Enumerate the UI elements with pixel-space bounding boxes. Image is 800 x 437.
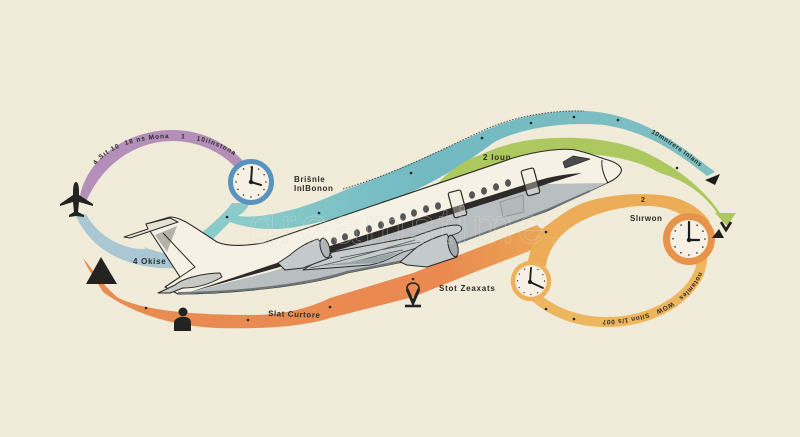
belly gray	[178, 183, 607, 294]
route: teal band	[202, 110, 715, 239]
door 2	[521, 168, 540, 196]
label: InlBonon: InlBonon	[294, 184, 333, 193]
belly shadow	[178, 191, 590, 293]
engine right	[400, 234, 460, 267]
route markers	[145, 116, 678, 321]
route: purple arc	[80, 130, 242, 200]
yellow label: notamles WOW Sllnn 1/s 007	[602, 272, 702, 324]
green label: 2 Ioun	[483, 153, 511, 162]
route: light blue arc	[76, 214, 176, 268]
engine left	[278, 237, 332, 270]
clock: small yellow	[513, 263, 549, 299]
windows	[331, 179, 511, 245]
door 1	[448, 190, 467, 218]
icon: location pin	[405, 278, 421, 306]
purple arc label: 4 Sıt 10 18 ns Mona 1 10ilnstona	[94, 134, 235, 164]
Slırwon label: Slırwon	[630, 214, 662, 223]
icon: person	[174, 308, 191, 331]
icon: teal arrowhead	[705, 174, 720, 185]
clock: blue	[230, 162, 272, 202]
dotted line to label	[343, 111, 584, 189]
nose line	[602, 160, 608, 183]
fuselage stripe	[190, 173, 582, 292]
tail fin and fuselage	[146, 149, 621, 294]
route: orange band	[83, 225, 552, 328]
light blue label: 4 Okise	[133, 257, 166, 266]
teal label: 10mnirers Inlans	[651, 130, 702, 166]
airplane	[124, 149, 621, 294]
top stabilizer	[124, 218, 178, 238]
black chevron	[721, 222, 731, 230]
route: yellow loop	[528, 194, 710, 328]
rudder line	[163, 233, 195, 277]
number 2: 2	[641, 197, 645, 204]
label: Brisnle: Brišnle	[294, 175, 325, 184]
clock: large orange	[666, 216, 712, 262]
lower stabilizer	[158, 273, 222, 293]
watermark: dreamstime.	[248, 198, 567, 254]
label: Stot Zeaxats: Stot Zeaxats	[439, 284, 496, 293]
icon: warning triangle	[86, 257, 117, 284]
route: green band with arrow	[437, 138, 736, 230]
cargo panel	[500, 195, 524, 217]
tail shading	[155, 226, 177, 252]
orange label: Slat Curtore	[268, 309, 321, 320]
icon: plane silhouette	[60, 182, 93, 217]
icon: clock triangle	[712, 229, 724, 238]
cockpit window	[563, 156, 590, 168]
wing	[303, 225, 462, 270]
